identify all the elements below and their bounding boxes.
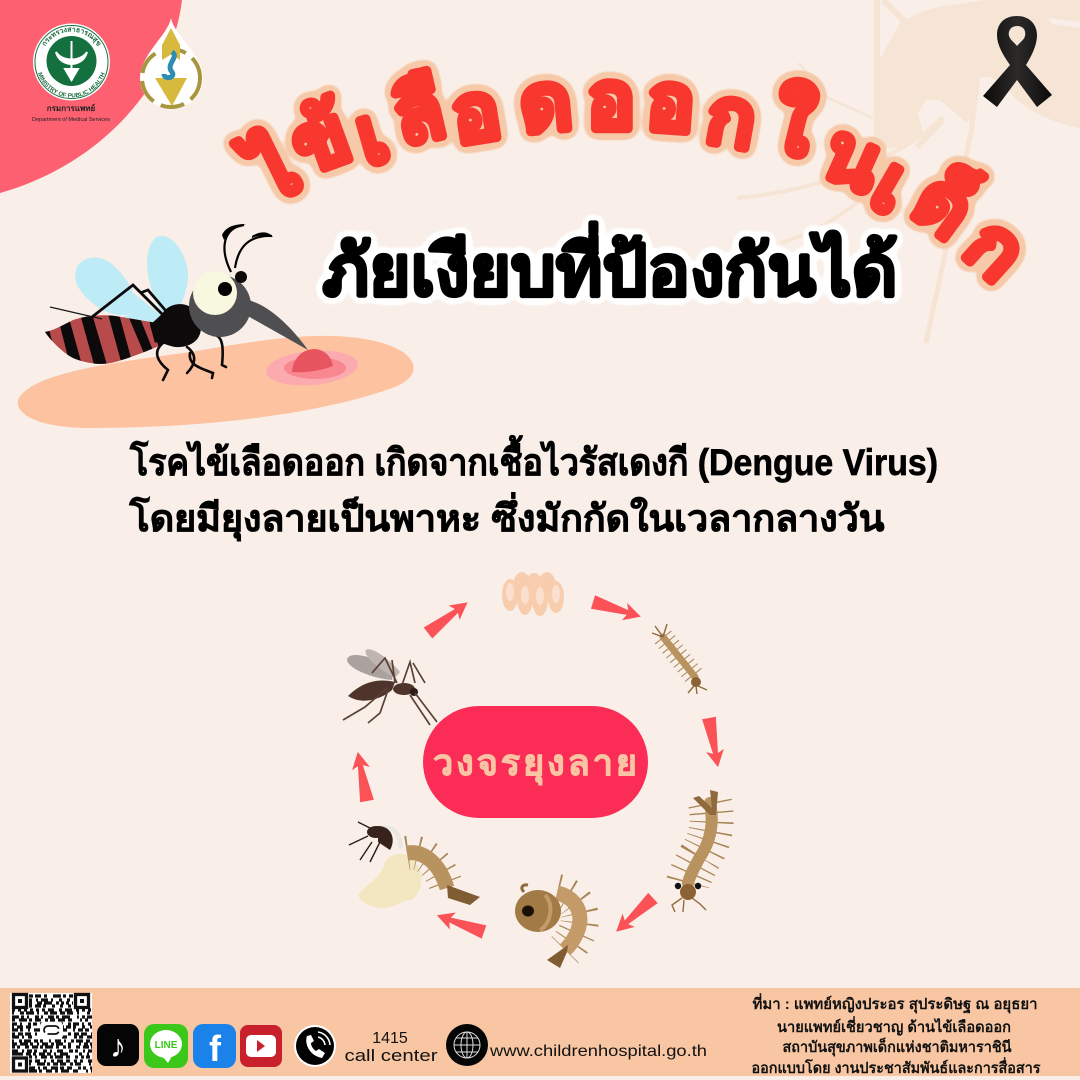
head and eye — [189, 275, 251, 337]
proboscis — [246, 300, 308, 350]
title: ไข้เลือดออกในเด็ก — [229, 56, 1044, 298]
antennae — [224, 225, 272, 272]
title: ไข้เลือดออกในเด็ก: ข้ — [280, 89, 362, 191]
title: ไข้เลือดออกในเด็ก: เ — [346, 89, 397, 182]
logo: ministry of public health — [32, 24, 110, 123]
icon: line: LINE — [155, 1040, 178, 1051]
subtitle: ภัยเงียบที่ป้องกันได้ — [322, 221, 898, 310]
stage: large larva — [672, 790, 718, 912]
hind leg line — [50, 307, 102, 319]
title: ไข้เลือดออกในเด็ก: ด — [516, 56, 575, 149]
footer bar — [0, 988, 1080, 1077]
stage: adult mosquito — [343, 649, 437, 725]
title: ไข้เลือดออกในเด็ก: น — [810, 106, 896, 210]
skin — [18, 336, 414, 428]
title: ไข้เลือดออกในเด็ก: ก — [700, 70, 763, 166]
credits: สถาบันสุขภาพเด็กแห่งชาติมหาราชินี — [782, 1037, 1012, 1057]
title: ไข้เลือดออกในเด็ก: ก — [949, 199, 1044, 298]
title: ไข้เลือดออกในเด็ก: อ — [587, 56, 635, 145]
icon: youtube — [240, 1025, 282, 1067]
call center: 1415 — [372, 1030, 408, 1047]
corner shape: pink circle — [0, 0, 182, 193]
logo: ministry of public health: กระทรวงสาธารณสุข — [42, 27, 101, 46]
bite — [265, 347, 359, 389]
hind legs — [92, 285, 172, 318]
black ribbon — [983, 16, 1052, 107]
icon: line — [144, 1024, 188, 1068]
title: ไข้เลือดออกในเด็ก: อ — [445, 65, 506, 161]
stage: pupa — [515, 885, 580, 968]
icon: tiktok — [97, 1024, 139, 1066]
title: ไข้เลือดออกในเด็ก: ใ — [763, 75, 823, 173]
logo: ministry of public health: MINISTRY OF PUBLIC HEALTH — [38, 72, 105, 98]
body — [150, 304, 201, 347]
logo: ministry of public health: Department of Medical Services — [32, 117, 110, 123]
call center — [344, 1030, 438, 1065]
QR code — [10, 993, 92, 1073]
icon: tiktok: ♪ — [110, 1028, 126, 1064]
title: ไข้เลือดออกในเด็ก: เ — [858, 140, 926, 231]
legs — [157, 335, 226, 380]
credits — [752, 993, 1041, 1077]
credits: ที่มา : แพทย์หญิงประอร สุประดิษฐ ณ อยุธยา — [752, 993, 1038, 1014]
credits: นายแพทย์เชี่ยวชาญ ด้านไข้เลือดออก — [777, 1016, 1011, 1036]
stage: eggs — [502, 572, 564, 616]
logo: children's institute — [140, 18, 203, 108]
background mosquito silhouette — [737, 0, 1080, 343]
logo: ministry of public health: กรมการแพทย์ — [47, 103, 96, 113]
stage: small larva — [652, 624, 707, 694]
title: ไข้เลือดออกในเด็ก: ไ — [229, 120, 313, 223]
description text — [128, 435, 938, 542]
cycle center label: วงจรยุงลาย — [433, 742, 637, 786]
stage: emerging adult — [349, 822, 480, 908]
title: ไข้เลือดออกในเด็ก: ด็ — [897, 150, 994, 256]
description text: โรคไข้เลือดออก เกิดจากเชื้อไวรัสเดงกี (Dengue Virus) — [129, 435, 938, 483]
title: ไข้เลือดออกในเด็ก: อ — [644, 56, 698, 149]
call center: call center — [344, 1047, 438, 1065]
description text: โดยมียุงลายเป็นพาหะ ซึ่งมักกัดในเวลากลางวัน — [128, 492, 884, 542]
icon: facebook: f — [209, 1028, 222, 1069]
icon: facebook — [193, 1024, 236, 1069]
icon: globe — [446, 1024, 488, 1066]
cycle center label — [423, 706, 648, 818]
icon: phone — [294, 1025, 336, 1067]
title: ไข้เลือดออกในเด็ก: ลื — [385, 64, 453, 162]
credits: ออกแบบโดย งานประชาสัมพันธ์และการสื่อสาร — [752, 1057, 1041, 1077]
wings — [75, 236, 188, 322]
cycle arrows — [349, 593, 727, 940]
illustration: mosquito biting skin — [18, 224, 414, 428]
abdomen — [45, 315, 164, 364]
website: www.childrenhospital.go.th — [489, 1043, 707, 1060]
